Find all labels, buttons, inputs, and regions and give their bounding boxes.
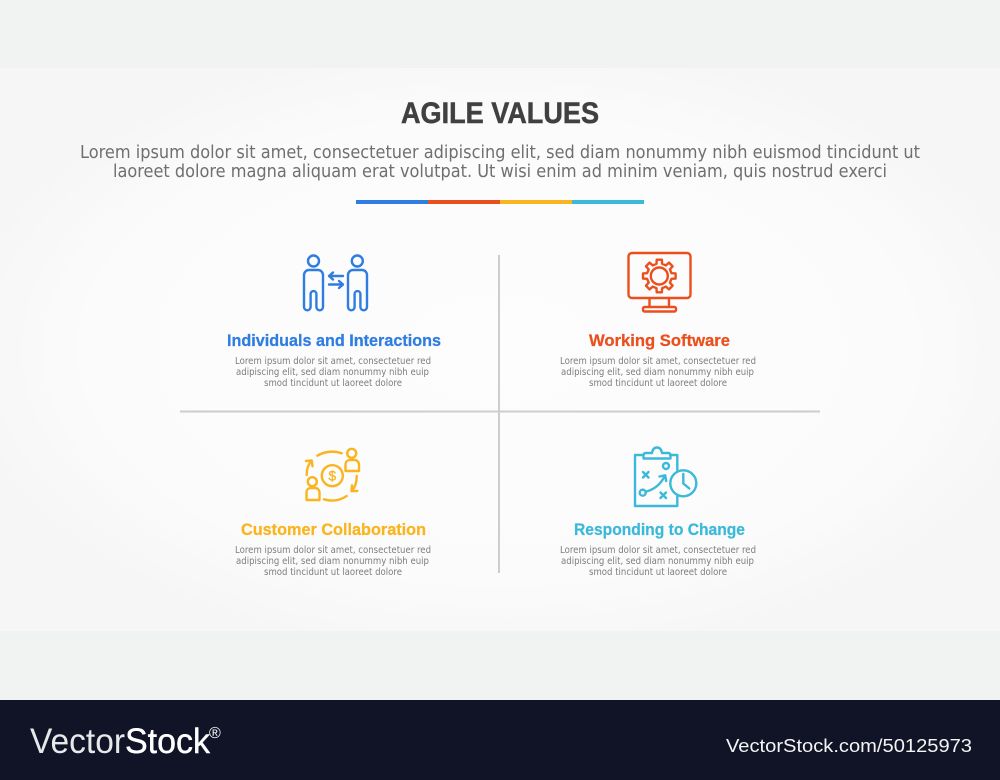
panel: customer collaboration xyxy=(235,449,431,578)
body text: Lorem ipsum dolor sit amet, consectetuer red xyxy=(235,356,431,367)
icon: monitor with gear xyxy=(628,253,690,312)
body text xyxy=(235,356,431,389)
body text: Lorem ipsum dolor sit amet, consectetuer red xyxy=(560,356,756,367)
footer logo: Vector xyxy=(30,722,125,761)
intro text: laoreet dolore magna aliquam erat volutpat. Ut wisi enim ad minim veniam, quis nostrud exerci xyxy=(113,162,887,182)
body text xyxy=(560,545,756,578)
body text: adipiscing elit, sed diam nonummy nibh euip xyxy=(236,556,429,567)
heading: Individuals and Interactions xyxy=(227,331,441,350)
body text: Lorem ipsum dolor sit amet, consectetuer red xyxy=(560,545,756,556)
heading: Responding to Change xyxy=(574,520,745,539)
body text: adipiscing elit, sed diam nonummy nibh euip xyxy=(561,367,754,378)
body text: smod tincidunt ut laoreet dolore xyxy=(589,378,727,389)
footer logo xyxy=(30,722,221,761)
title: AGILE VALUES xyxy=(401,97,599,130)
body text: smod tincidunt ut laoreet dolore xyxy=(589,567,727,578)
icon: customers and money cycle xyxy=(306,449,359,501)
icon: two people exchanging xyxy=(304,256,367,310)
panel: individuals and interactions xyxy=(227,256,441,389)
intro text xyxy=(80,143,920,182)
colour bar xyxy=(356,200,644,204)
panel: working software xyxy=(560,253,756,389)
light central panel xyxy=(0,68,1000,631)
icon: clipboard plan and clock xyxy=(635,448,696,506)
panel: responding to change xyxy=(560,448,756,578)
heading: Working Software xyxy=(589,331,730,350)
intro text: Lorem ipsum dolor sit amet, consectetuer adipiscing elit, sed diam nonummy nibh euismod tincidunt ut xyxy=(80,143,920,163)
footer band xyxy=(0,700,1000,780)
icon: dollar sign: $ xyxy=(328,468,336,484)
footer image id: VectorStock.com/50125973 xyxy=(726,736,972,756)
body text xyxy=(235,545,431,578)
body text: adipiscing elit, sed diam nonummy nibh euip xyxy=(236,367,429,378)
body text xyxy=(560,356,756,389)
body text: adipiscing elit, sed diam nonummy nibh euip xyxy=(561,556,754,567)
footer logo: Stock xyxy=(125,722,210,761)
footer logo: ® xyxy=(209,725,221,742)
quadrant divider lines xyxy=(180,255,820,573)
body text: smod tincidunt ut laoreet dolore xyxy=(264,378,402,389)
body text: smod tincidunt ut laoreet dolore xyxy=(264,567,402,578)
body text: Lorem ipsum dolor sit amet, consectetuer red xyxy=(235,545,431,556)
heading: Customer Collaboration xyxy=(241,520,426,539)
